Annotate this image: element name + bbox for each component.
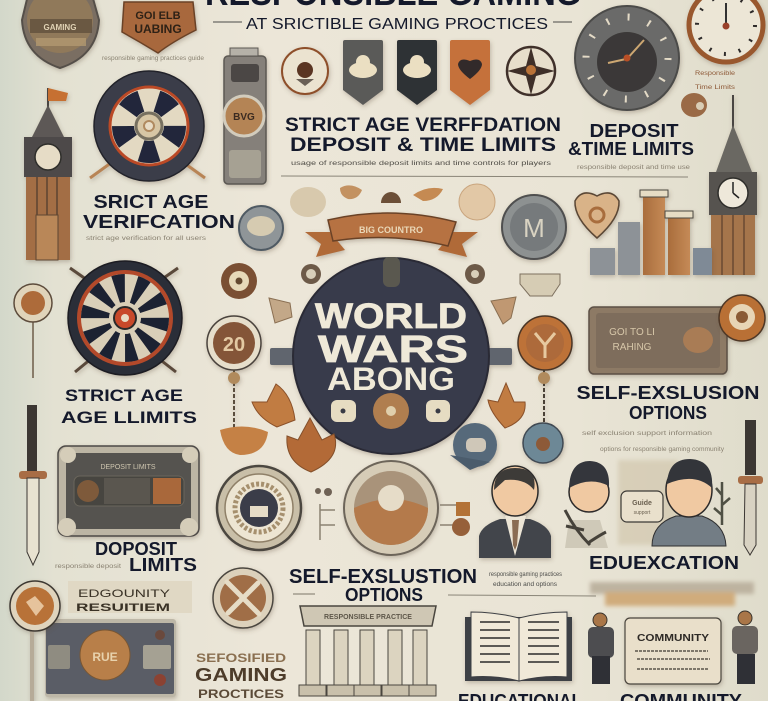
heading: deposit and time limits right	[568, 121, 694, 159]
heading: strict age verification left: VERIFCATION	[83, 212, 235, 232]
bar chart	[590, 190, 712, 275]
icon: orange medallion right	[719, 295, 765, 341]
open book	[465, 612, 572, 681]
tiny caption: responsible deposit	[55, 564, 121, 570]
badge: top left round	[22, 0, 99, 68]
icon: orange pin left	[14, 284, 52, 378]
card: community: COMMUNITY	[637, 633, 709, 644]
card: community	[625, 618, 721, 684]
community resolution label: RESUITIEM	[76, 602, 170, 614]
heading: strict age verification left: SRICT AGE	[94, 192, 208, 212]
tiny caption: usage of responsible deposit limits and time controls for players	[291, 161, 551, 167]
tiny note: clock caption	[695, 71, 736, 91]
tiny caption	[489, 572, 562, 588]
panel: gold baring right: RAHING	[613, 342, 652, 353]
heading: self exclusion options center	[289, 566, 477, 605]
heading: strict age verification and deposit limits	[285, 115, 561, 156]
tiny caption: strict age verification for all users	[86, 236, 206, 242]
icon: coin right of banner	[502, 195, 566, 259]
icon: ring emblem	[282, 48, 328, 94]
dartboard top	[90, 71, 205, 181]
icon: orange shield	[450, 40, 490, 105]
leaves left	[220, 384, 336, 472]
person: community left	[588, 613, 614, 684]
person: teen	[652, 459, 730, 546]
tiny caption: responsible deposit and time use	[577, 165, 691, 171]
panel: gold baring right	[589, 307, 727, 374]
community resolution label: EDGOUNITY	[78, 588, 171, 600]
blue flower	[450, 423, 497, 470]
heading: deposit and time limits right: &TIME LIMITS	[568, 139, 694, 159]
badge: top brown	[122, 2, 196, 53]
sword left	[19, 405, 47, 565]
icon: blue token	[523, 423, 563, 463]
speech card	[621, 491, 663, 522]
heading: education: EDUEXCATION	[589, 553, 739, 573]
shaded patch behind people	[618, 460, 678, 545]
icon: coin right of banner: M	[523, 213, 545, 243]
main disc title	[315, 297, 468, 397]
icon: heart	[575, 193, 619, 238]
medallion left of disc	[207, 316, 261, 430]
icon: crossed x	[213, 568, 273, 628]
tiny caption: education and options	[493, 582, 557, 588]
community resolution label	[68, 581, 192, 614]
icon: dark shield 2	[397, 40, 437, 105]
heading: deposit and time limits right: DEPOSIT	[590, 121, 679, 141]
panel: console lower left: RUE	[92, 650, 118, 664]
decorative row of ornaments	[290, 184, 495, 220]
main disc title: ABONG	[327, 361, 455, 397]
heading: strict age verification and deposit limits: DEPOSIT & TIME LIMITS	[290, 135, 556, 156]
speech card: support	[634, 510, 651, 516]
heading: deposit limits lower: LIMITS	[129, 555, 197, 575]
heading: deposit limits lower	[95, 539, 197, 575]
tiny caption: self exclusion support information	[582, 431, 712, 437]
tiny note: clock caption: Responsible	[695, 71, 736, 77]
temple: RESPONSIBLE PRACTICE	[324, 614, 412, 621]
heading: strict age limits: AGE LLIMITS	[61, 408, 197, 427]
panel: deposit limits dashboard: DEPOSIT LIMITS	[100, 464, 156, 471]
heading: deposit limits lower: DOPOSIT	[95, 539, 177, 559]
person: community right	[732, 611, 758, 684]
icon: orange medallion bottom left	[10, 581, 60, 701]
sword right	[738, 420, 763, 555]
heading: self exclusion options center: OPTIONS	[345, 585, 423, 605]
panel: gold baring right: GOI TO LI	[609, 327, 655, 338]
heading: responsible gaming practices lower	[195, 651, 287, 701]
medallion right of disc	[518, 316, 572, 425]
heading: self exclusion options right: OPTIONS	[629, 403, 707, 423]
person: boy with plant	[565, 461, 609, 548]
tiny caption: options for responsible gaming community	[600, 447, 724, 453]
heading: strict age verification and deposit limits: STRICT AGE VERFFDATION	[285, 115, 561, 136]
icon: small brown token	[681, 93, 707, 117]
icon: dark shield 1	[343, 40, 383, 105]
leaves right	[488, 383, 525, 428]
heading: strict age limits	[61, 386, 197, 427]
heading: responsible gaming practices lower: GAMING	[195, 665, 287, 685]
clock tower right	[709, 95, 757, 275]
disc buttons	[331, 393, 450, 429]
icon: small medallion	[239, 206, 283, 250]
dartboard left	[68, 261, 182, 375]
heading: responsible gaming practices lower: PROCTICES	[198, 687, 284, 701]
banner ribbon: BIG COUNTRO	[359, 225, 423, 235]
subtitle: AT SRICTIBLE GAMING PROCTICES	[246, 16, 548, 33]
main disc	[270, 257, 512, 454]
main disc title: WARS	[318, 329, 468, 371]
temple	[299, 606, 436, 696]
badge: top left round: GAMING	[44, 23, 76, 32]
banner ribbon	[305, 213, 478, 257]
heading: responsible gaming practices lower: SEFOSIFIED	[196, 651, 286, 665]
panel: deposit limits dashboard	[58, 446, 199, 536]
panel: console lower left	[45, 619, 176, 697]
heading: self exclusion options right	[576, 383, 760, 423]
person: suit	[479, 466, 551, 558]
device: vertical machine	[224, 48, 266, 184]
clock: large dark	[575, 6, 679, 110]
icon: compass	[507, 47, 555, 95]
heading: strict age limits: STRICT AGE	[65, 386, 183, 405]
clock: small wood	[689, 0, 763, 62]
clock tower left	[24, 88, 72, 260]
speech card: Guide	[632, 500, 652, 507]
heading: self exclusion options center: SELF-EXSLUSTION	[289, 566, 477, 588]
clock: center lower dial	[344, 461, 438, 555]
tiny caption: responsible gaming practices	[489, 572, 562, 578]
heading: strict age verification left	[83, 192, 235, 232]
heading: self exclusion options right: SELF-EXSLUSION	[576, 383, 760, 403]
tiny note: clock caption: Time Limits	[695, 85, 735, 91]
small ornaments around disc	[221, 263, 560, 324]
blurred community strip	[590, 582, 754, 606]
badge: top brown: GOI ELB	[135, 10, 181, 22]
icon: dial badge	[217, 466, 301, 550]
medallion left of disc: 20	[223, 334, 245, 356]
main disc title: WORLD	[315, 297, 467, 336]
tiny caption: responsible gaming practices guide	[102, 56, 205, 62]
small ornaments under leaves	[315, 488, 470, 540]
device: vertical machine: BVG	[233, 112, 255, 123]
badge: top brown: UABING	[134, 22, 182, 36]
